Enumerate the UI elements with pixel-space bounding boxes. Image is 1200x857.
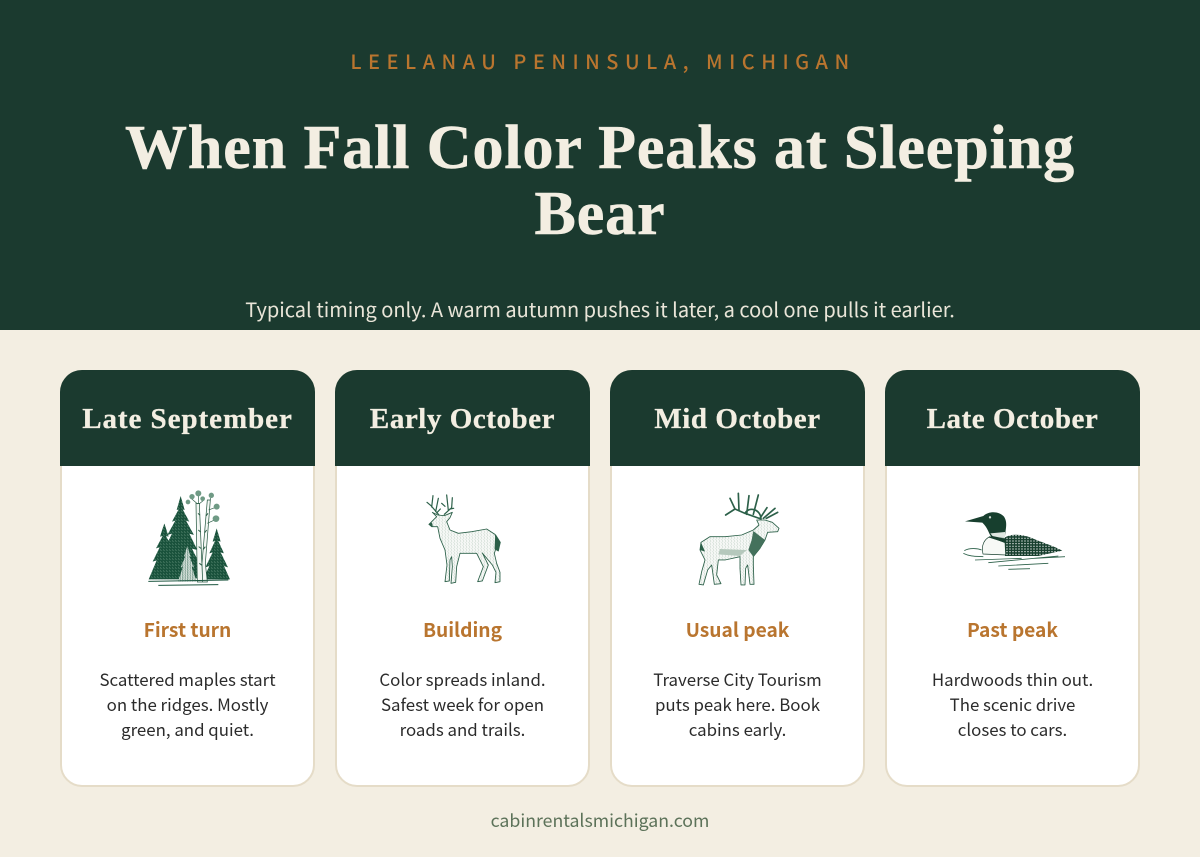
description: on the ridges. Mostly — [107, 691, 268, 716]
title — [125, 114, 1075, 248]
status: First turn — [144, 615, 231, 643]
card: early october — [335, 370, 590, 787]
icon: deer — [427, 495, 500, 583]
description: closes to cars. — [958, 716, 1067, 741]
header band — [0, 0, 1200, 330]
card: late october — [885, 370, 1140, 787]
description — [379, 666, 546, 741]
card: mid october — [610, 370, 865, 787]
description — [653, 666, 822, 741]
icon: forest — [148, 490, 230, 585]
description: roads and trails. — [400, 716, 525, 741]
title: When Fall Color Peaks at Sleeping — [125, 114, 1075, 182]
description — [99, 666, 276, 741]
card: late september — [60, 370, 315, 787]
description: The scenic drive — [950, 691, 1075, 716]
status: Usual peak — [686, 615, 789, 643]
card header: Early October — [370, 403, 555, 435]
status: Building — [423, 615, 502, 643]
card header — [335, 370, 590, 466]
card header — [885, 370, 1140, 466]
description: Traverse City Tourism — [653, 666, 822, 691]
description: Hardwoods thin out. — [932, 666, 1093, 691]
subtitle: Typical timing only. A warm autumn pushes it later, a cool one pulls it earlier. — [245, 294, 955, 323]
description: Scattered maples start — [99, 666, 276, 691]
description: puts peak here. Book — [655, 691, 820, 716]
icon: loon — [963, 512, 1065, 569]
description: Color spreads inland. — [379, 666, 546, 691]
description: Safest week for open — [381, 691, 544, 716]
description: green, and quiet. — [121, 716, 254, 741]
icon: elk — [699, 493, 779, 585]
card header: Mid October — [654, 403, 821, 435]
card header — [60, 370, 315, 466]
title: Bear — [534, 180, 666, 248]
description: cabins early. — [689, 716, 786, 741]
status: Past peak — [967, 615, 1058, 643]
footer url: cabinrentalsmichigan.com — [491, 807, 709, 833]
eyebrow: LEELANAU PENINSULA, MICHIGAN — [350, 46, 856, 75]
card header: Late October — [927, 403, 1098, 435]
card header: Late September — [82, 403, 293, 435]
card header — [610, 370, 865, 466]
description — [932, 666, 1093, 741]
